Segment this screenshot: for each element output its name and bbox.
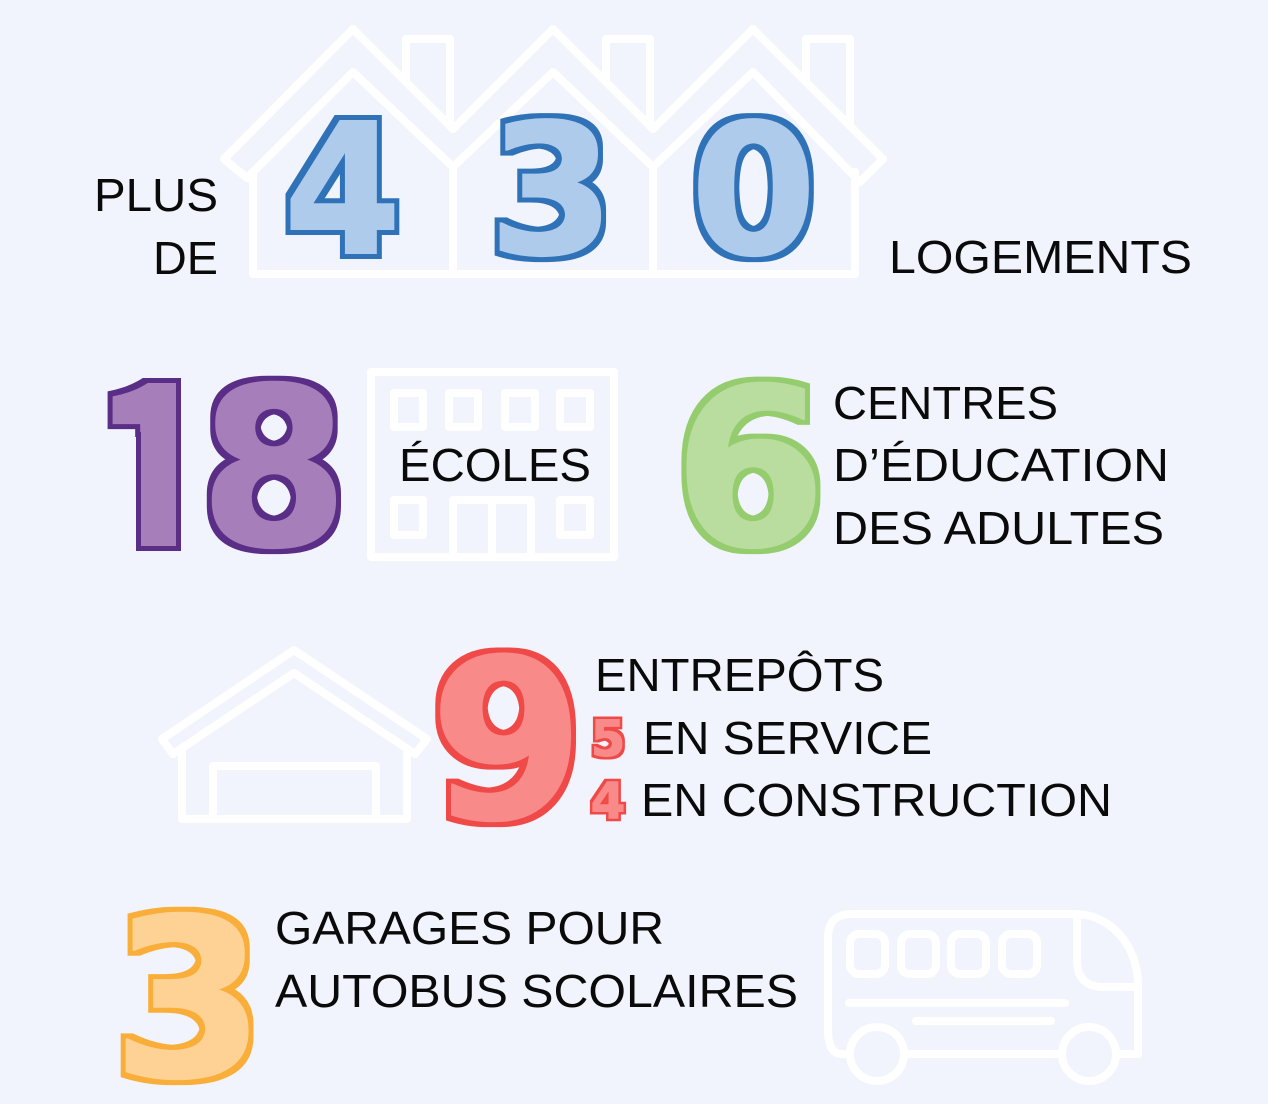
number: 5: 5	[591, 710, 625, 768]
number: 1: 1	[95, 294, 215, 605]
text: plus de: DE	[153, 232, 218, 284]
icon: school bus	[828, 914, 1138, 1081]
text: centres d'éducation des adultes	[833, 377, 1169, 554]
text: écoles: ÉCOLES	[399, 439, 591, 491]
number: 6: 6	[674, 342, 826, 597]
number: 0: 0	[691, 86, 816, 296]
text: garages pour autobus scolaires: GARAGES POUR	[275, 902, 664, 954]
number: 9: 9	[430, 613, 584, 871]
text: plus de: PLUS	[94, 169, 218, 221]
text: en construction: EN CONSTRUCTION	[641, 774, 1112, 826]
number: 8: 8	[200, 342, 348, 598]
icon: warehouse	[162, 650, 427, 819]
text: en service: EN SERVICE	[643, 712, 932, 764]
text: centres d'éducation des adultes: DES ADULTES	[833, 502, 1164, 554]
icon: school building	[371, 372, 614, 557]
text: centres d'éducation des adultes: CENTRES	[833, 377, 1058, 429]
text: plus de	[94, 169, 218, 284]
text: entrepôts: ENTREPÔTS	[595, 649, 884, 701]
text: garages pour autobus scolaires	[275, 902, 798, 1017]
number: 3: 3	[489, 86, 614, 296]
text: garages pour autobus scolaires: AUTOBUS SCOLAIRES	[275, 965, 798, 1017]
number: 4: 4	[284, 86, 401, 296]
text: logements: LOGEMENTS	[889, 231, 1192, 283]
icon: row of three houses	[224, 29, 883, 274]
text: centres d'éducation des adultes: D’ÉDUCATION	[833, 439, 1169, 491]
number: 4 small: 4	[591, 772, 625, 830]
